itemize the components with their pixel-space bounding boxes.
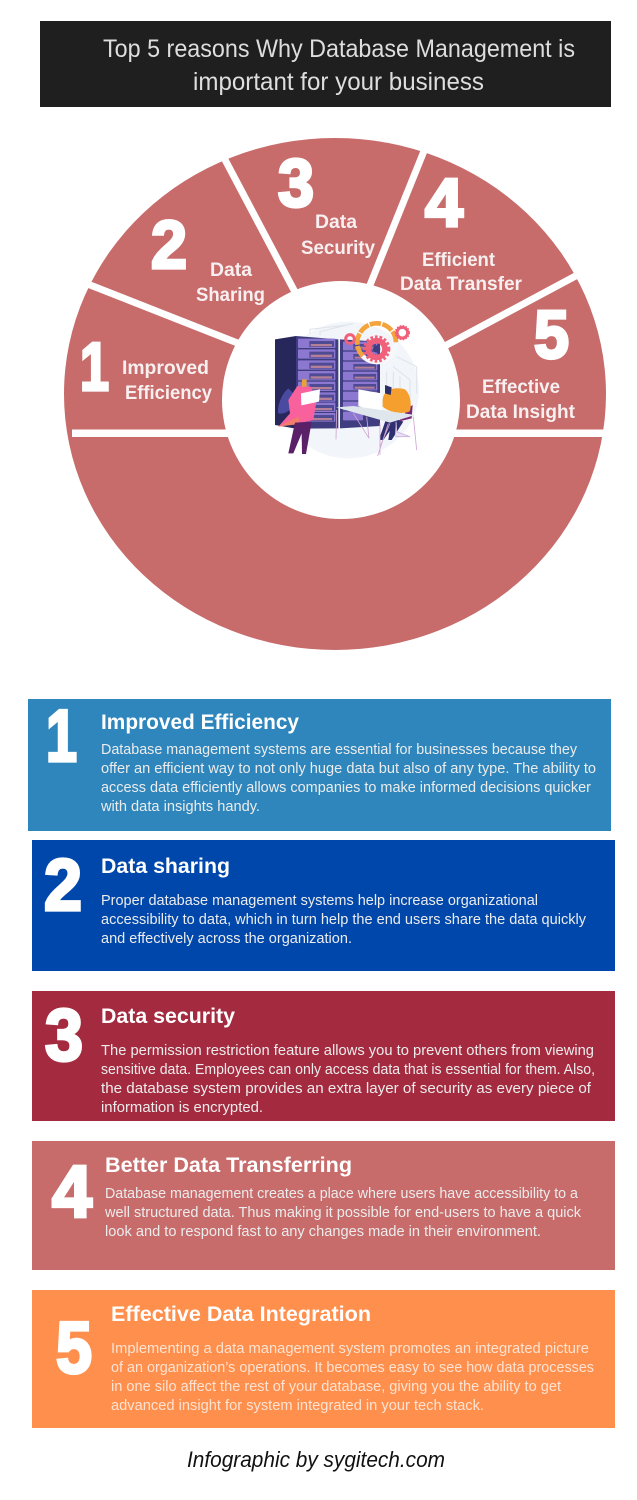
text block xyxy=(100,742,596,815)
segment 4 label: Efficient xyxy=(422,250,496,271)
text block: look and to respond fast to any changes made in their environment. xyxy=(105,1224,541,1240)
text block: the database system provides an extra layer of security as every piece of xyxy=(101,1081,592,1097)
segment 2 label: Data xyxy=(210,260,252,281)
segment 3 label: Data xyxy=(315,212,357,233)
segment 2 label xyxy=(151,207,265,306)
segment 3 label xyxy=(278,145,375,259)
segment 4 label: 4 xyxy=(425,165,463,241)
heading: Better Data Transferring xyxy=(105,1154,352,1177)
segment 5 label xyxy=(466,297,576,423)
segment 4 label: Data Transfer xyxy=(400,274,523,295)
text block: advanced insight for system integrated in your tech stack. xyxy=(111,1398,484,1414)
footer credit: Infographic by sygitech.com xyxy=(187,1447,445,1472)
panel: 3 Data security xyxy=(32,991,615,1121)
segment 1 label: Improved xyxy=(122,358,209,379)
panel: 2 Data sharing: 2 xyxy=(44,845,82,926)
text block: The permission restriction feature allows you to prevent others from viewing xyxy=(101,1043,594,1059)
heading: Data sharing xyxy=(101,855,230,878)
segment 2 label: 2 xyxy=(151,207,187,283)
title banner: Top 5 reasons Why Database Management is xyxy=(103,35,575,63)
segment 3 label: 3 xyxy=(278,145,314,221)
text block: accessibility to data, which in turn help the end users share the data quickly xyxy=(101,912,587,928)
donut wheel diagram xyxy=(64,138,612,650)
icon: desk with man and monitor xyxy=(336,385,417,456)
panel: 2 Data sharing xyxy=(32,840,615,971)
segment 1 label: Efficiency xyxy=(125,383,212,404)
text block: Proper database management systems help increase organizational xyxy=(101,893,538,909)
segment 1 label: 1 xyxy=(80,329,109,405)
text block: access data efficiently allows companies to make informed decisions quicker xyxy=(101,780,591,796)
segment 1 label xyxy=(80,329,212,405)
text block: of an organization’s operations. It becomes easy to see how data processes xyxy=(111,1360,594,1376)
panel: 1 Improved Efficiency: 1 xyxy=(46,696,77,777)
text block: offer an efficient way to not only huge data but also of any type. The ability to xyxy=(101,761,596,777)
segment 3 label: Security xyxy=(301,238,375,259)
icon: database server illustration xyxy=(275,322,419,458)
panel: 3 Data security: 3 xyxy=(45,995,83,1076)
text block: information is encrypted. xyxy=(101,1100,263,1116)
text block xyxy=(101,893,587,947)
heading: Effective Data Integration xyxy=(111,1303,371,1326)
panel: 5 Effective Data Integration xyxy=(32,1290,615,1428)
title banner xyxy=(40,21,611,107)
title banner: important for your business xyxy=(193,68,484,96)
text block xyxy=(111,1341,594,1414)
panel: 4 Better Data Transferring: 4 xyxy=(52,1152,92,1233)
icon: gears xyxy=(346,323,409,362)
segment 5 label: Effective xyxy=(482,377,560,398)
text block: Database management creates a place where users have accessibility to a xyxy=(105,1186,579,1202)
text block: and effectively across the organization. xyxy=(101,931,352,947)
panel: 1 Improved Efficiency xyxy=(28,696,611,831)
segment 4 label xyxy=(400,165,523,295)
heading: Improved Efficiency xyxy=(101,711,299,734)
segment 5 label: Data Insight xyxy=(466,402,576,423)
icon: woman with tablet xyxy=(278,379,320,454)
segment 5 label: 5 xyxy=(534,297,569,373)
text block: Implementing a data management system promotes an integrated picture xyxy=(111,1341,589,1357)
text block: Database management systems are essential for businesses because they xyxy=(101,742,578,758)
text block xyxy=(101,1043,595,1116)
text block: well structured data. Thus making it possible for end-users to have a quick xyxy=(104,1205,582,1221)
heading: Data security xyxy=(101,1005,235,1028)
segment 2 label: Sharing xyxy=(196,285,265,306)
panel: 5 Effective Data Integration: 5 xyxy=(56,1308,92,1389)
text block: with data insights handy. xyxy=(100,799,260,815)
text block: sensitive data. Employees can only access data that is essential for them. Also, xyxy=(101,1062,595,1078)
text block: in one silo affect the rest of your database, giving you the ability to get xyxy=(111,1379,561,1395)
panel: 4 Better Data Transferring xyxy=(32,1141,615,1270)
text block xyxy=(104,1186,582,1240)
